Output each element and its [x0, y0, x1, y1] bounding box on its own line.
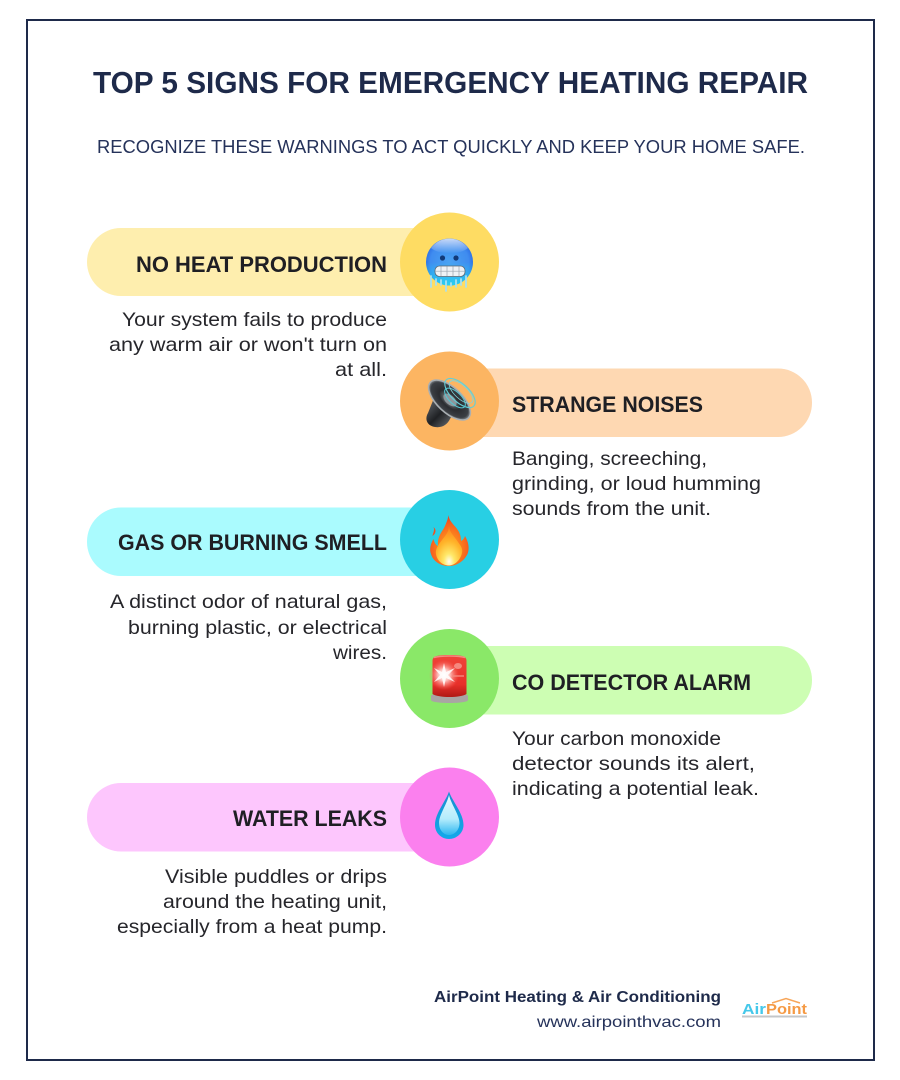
title: TOP 5 SIGNS FOR EMERGENCY HEATING REPAIR — [93, 65, 808, 100]
description: co detector alarm: Your carbon monoxide — [512, 728, 721, 750]
icon circle: fire — [400, 490, 499, 589]
description: water leaks: especially from a heat pump. — [117, 916, 387, 938]
description: strange noises — [512, 448, 761, 520]
icon circle: speaker — [400, 352, 499, 450]
subtitle: RECOGNIZE THESE WARNINGS TO ACT QUICKLY AND KEEP YOUR HOME SAFE. — [97, 136, 805, 157]
pill: strange noises — [432, 368, 812, 437]
pill: no heat production — [87, 228, 467, 296]
description: gas or burning smell: A distinct odor of natural gas, — [110, 591, 387, 613]
description: no heat production: at all. — [335, 359, 387, 381]
pill: water leaks — [87, 783, 467, 852]
logo: Air — [742, 1001, 766, 1018]
description: water leaks — [117, 866, 387, 938]
description: water leaks: Visible puddles or drips — [165, 866, 387, 888]
panel: no heat production — [87, 212, 499, 381]
panel: water leaks — [87, 768, 499, 938]
footer company name: AirPoint Heating & Air Conditioning — [434, 989, 721, 1006]
description: gas or burning smell: burning plastic, or electrical — [128, 617, 387, 639]
panel: co detector alarm — [400, 629, 812, 800]
panel: gas or burning smell — [87, 490, 499, 664]
description: gas or burning smell: wires. — [332, 642, 387, 664]
icon circle: freezing face — [400, 212, 499, 312]
description: water leaks: around the heating unit, — [163, 891, 387, 913]
logo — [742, 998, 807, 1018]
footer website: www.airpointhvac.com — [536, 1014, 721, 1031]
description: strange noises: Banging, screeching, — [512, 448, 707, 470]
icon circle: siren — [400, 629, 499, 728]
heading: co detector alarm: CO DETECTOR ALARM — [512, 670, 751, 695]
description: co detector alarm: indicating a potential leak. — [512, 778, 759, 800]
heading: no heat production: NO HEAT PRODUCTION — [136, 252, 387, 277]
description: no heat production: Your system fails to produce — [122, 309, 387, 331]
description: co detector alarm: detector sounds its alert, — [512, 753, 755, 775]
icon circle: water drop — [400, 768, 499, 866]
description: no heat production — [109, 309, 387, 381]
heading: strange noises: STRANGE NOISES — [512, 392, 703, 417]
description: strange noises: grinding, or loud humming — [512, 473, 761, 495]
heading: gas or burning smell: GAS OR BURNING SMELL — [118, 530, 387, 555]
description: no heat production: any warm air or won't turn on — [109, 334, 387, 356]
description: strange noises: sounds from the unit. — [512, 498, 711, 520]
panel: strange noises — [400, 352, 812, 520]
heading: water leaks: WATER LEAKS — [233, 806, 387, 831]
logo: Point — [766, 1001, 807, 1018]
description: co detector alarm — [512, 728, 759, 800]
pill: gas or burning smell — [87, 508, 467, 576]
pill: co detector alarm — [432, 646, 812, 714]
description: gas or burning smell — [110, 591, 387, 664]
